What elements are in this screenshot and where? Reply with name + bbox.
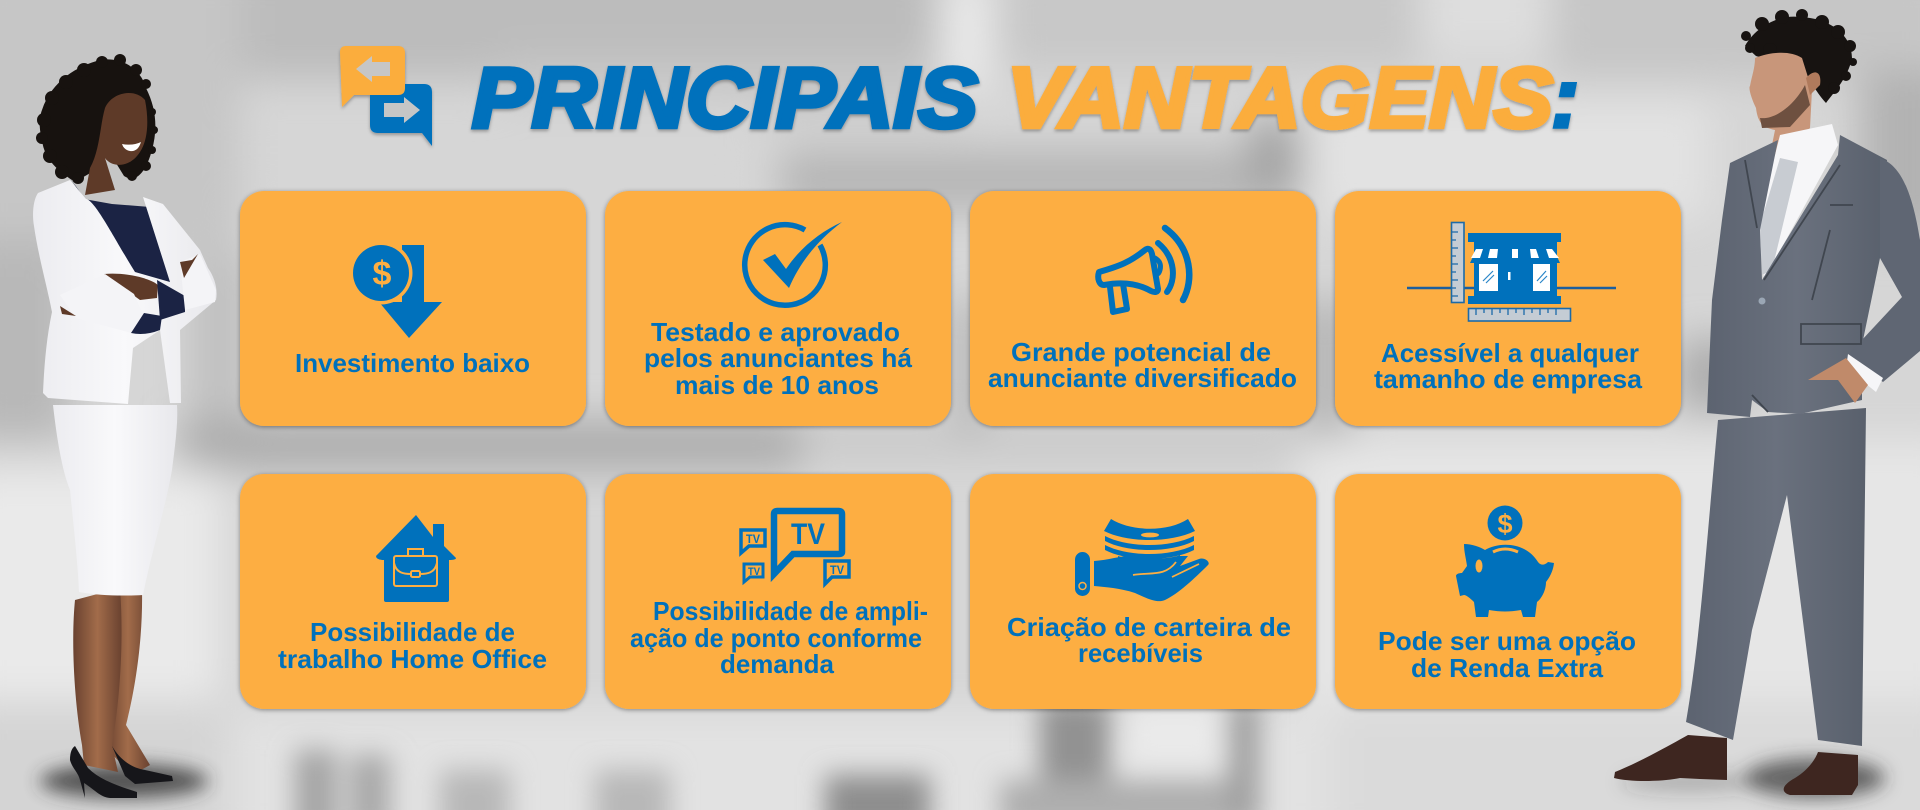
icon: house with briefcase <box>376 515 456 602</box>
figure: businesswoman <box>33 54 217 798</box>
arms <box>60 254 216 334</box>
shirt cuff and hand <box>1808 354 1883 403</box>
icon: tv speech bubbles: TV <box>748 566 761 578</box>
label: trabalho Home Office <box>278 644 547 674</box>
icon: tv speech bubbles: TV <box>830 563 844 577</box>
icon: hand holding money <box>1075 519 1209 601</box>
label <box>630 596 928 679</box>
floor shadow <box>1620 758 1885 798</box>
icon: orange bubble <box>340 46 405 107</box>
title: PRINCIPAIS <box>472 51 978 146</box>
label: Pode ser uma opção <box>1378 626 1636 656</box>
face and neck <box>85 93 147 195</box>
label: Testado e aprovado <box>651 317 900 347</box>
label: pelos anunciantes há <box>644 343 913 373</box>
shoes <box>70 746 173 798</box>
shoes <box>1614 735 1858 795</box>
panel: acessivel <box>1335 191 1681 426</box>
panel: grande potencial <box>970 191 1316 426</box>
label: Grande potencial de <box>1011 337 1271 367</box>
icon: megaphone <box>1098 228 1189 312</box>
jacket button <box>1758 298 1766 304</box>
icon: tv speech bubbles <box>741 511 849 584</box>
panel: home office <box>240 474 586 709</box>
title icon: speech bubbles with arrows <box>340 46 432 146</box>
icon: piggy bank with coin <box>1456 506 1554 617</box>
title: VANTAGENS <box>1007 51 1553 146</box>
shirt <box>70 178 185 334</box>
label: tamanho de empresa <box>1374 364 1643 394</box>
hair <box>36 54 158 184</box>
panel: ampliacao de ponto <box>605 474 951 709</box>
title <box>472 51 1579 146</box>
icon: circled check <box>745 222 842 305</box>
icon: coin with down arrow: $ <box>373 255 392 293</box>
title: : <box>1551 51 1579 146</box>
legs <box>73 588 150 775</box>
trousers <box>1686 408 1866 746</box>
icon: tv speech bubbles: TV <box>791 518 825 551</box>
icon: piggy bank with coin: $ <box>1497 509 1513 539</box>
jacket <box>33 180 217 404</box>
label: ação de ponto conforme <box>630 623 922 653</box>
label <box>988 337 1297 393</box>
label: mais de 10 anos <box>675 370 879 400</box>
label: recebíveis <box>1078 638 1203 668</box>
label: Investimento baixo <box>295 348 530 378</box>
label <box>644 317 913 400</box>
shirt <box>1758 124 1838 280</box>
hair <box>1741 9 1857 103</box>
label: Possibilidade de ampli- <box>653 596 928 626</box>
label: Possibilidade de <box>310 617 515 647</box>
panel: investimento baixo <box>240 191 586 426</box>
panel: carteira de recebiveis <box>970 474 1316 709</box>
label: de Renda Extra <box>1411 653 1604 683</box>
face and neck <box>1749 53 1812 165</box>
icon: coin with down arrow <box>350 242 442 338</box>
figure: businessman <box>1614 9 1920 798</box>
icon: store with rulers <box>1407 222 1616 321</box>
jacket torso <box>1707 135 1887 417</box>
label <box>1378 626 1636 683</box>
label: Criação de carteira de <box>1007 612 1291 642</box>
label: anunciante diversificado <box>988 363 1297 393</box>
skirt <box>53 405 177 596</box>
label <box>1374 338 1643 394</box>
panel: renda extra <box>1335 474 1681 709</box>
label <box>1007 612 1291 668</box>
label: Acessível a qualquer <box>1381 338 1639 368</box>
tie <box>1760 158 1798 275</box>
floor shadow <box>40 764 208 798</box>
label <box>278 617 547 674</box>
jacket sleeve <box>1847 158 1920 382</box>
lapel lines and pockets <box>1745 160 1861 412</box>
panel: testado e aprovado <box>605 191 951 426</box>
label: demanda <box>720 649 835 679</box>
icon: tv speech bubbles: TV <box>746 532 760 546</box>
icon: blue bubble <box>370 84 432 146</box>
